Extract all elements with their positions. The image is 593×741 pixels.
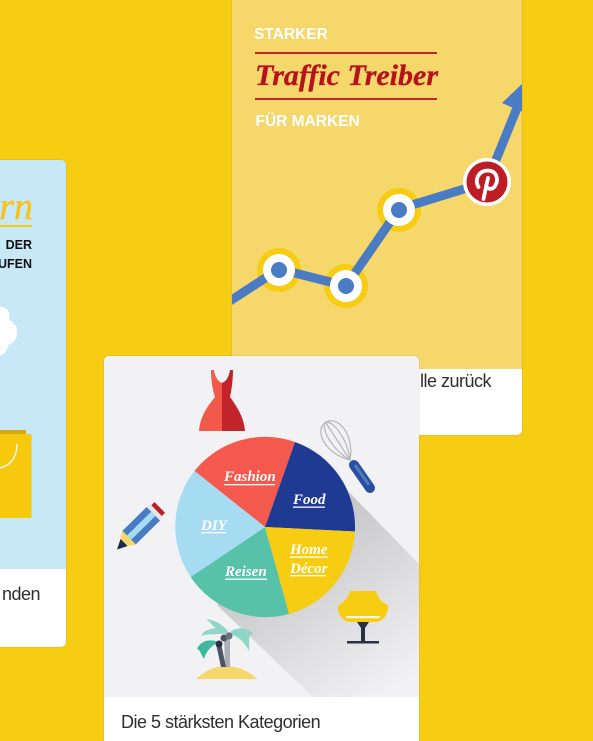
data point 3 xyxy=(383,194,415,226)
label: Décor: Décor xyxy=(289,561,328,577)
trend line with arrow xyxy=(230,83,523,301)
pie chart xyxy=(175,437,355,617)
icon: shopping bag xyxy=(0,430,32,518)
chart: rising traffic line xyxy=(232,84,522,308)
caption: partially hidden: nden xyxy=(2,584,40,604)
caption: Die 5 stärksten Kategorien xyxy=(121,712,320,732)
icon: chair xyxy=(338,591,388,644)
yellow node halos xyxy=(257,188,421,308)
kicker: STARKER: STARKER xyxy=(254,26,328,43)
long shadow of pie xyxy=(217,488,419,697)
icon: pencil xyxy=(110,500,167,557)
caption: partially hidden: lle zurück xyxy=(420,371,491,391)
subtitle: FÜR MARKEN: FÜR MARKEN xyxy=(256,113,360,130)
slice: Fashion xyxy=(194,437,295,527)
title: Traffic Treiber xyxy=(255,52,437,100)
card illustration background xyxy=(232,0,522,369)
label: Fashion: Fashion xyxy=(223,469,276,485)
label: Home: Home xyxy=(289,542,328,558)
panel: traffic driver card xyxy=(232,0,522,435)
illustration xyxy=(104,356,419,697)
title fragment: rn xyxy=(0,186,33,228)
label: DIY: DIY xyxy=(200,518,229,534)
icon: red dress xyxy=(199,370,245,431)
slice: DIY xyxy=(175,471,265,577)
icon: cloud xyxy=(0,306,18,356)
illustration background xyxy=(104,356,419,697)
title: Traffic Treiber: Traffic Treiber xyxy=(255,59,438,92)
slice: Reisen xyxy=(191,527,289,617)
data point 1 xyxy=(263,254,295,286)
panel: shopping card xyxy=(0,160,66,647)
slice: Home Décor xyxy=(265,527,355,614)
panel: top categories card xyxy=(104,356,419,741)
data point 2 xyxy=(330,270,362,302)
text fragment: DER: DER xyxy=(6,238,32,252)
title underline xyxy=(0,225,32,227)
slice: Food xyxy=(265,442,355,532)
card illustration background xyxy=(0,160,66,569)
icon: palm island xyxy=(196,619,257,679)
icon: whisk xyxy=(315,416,370,488)
label: Food: Food xyxy=(292,492,326,508)
label: Reisen: Reisen xyxy=(224,564,267,580)
icon: Pinterest logo xyxy=(463,158,511,206)
